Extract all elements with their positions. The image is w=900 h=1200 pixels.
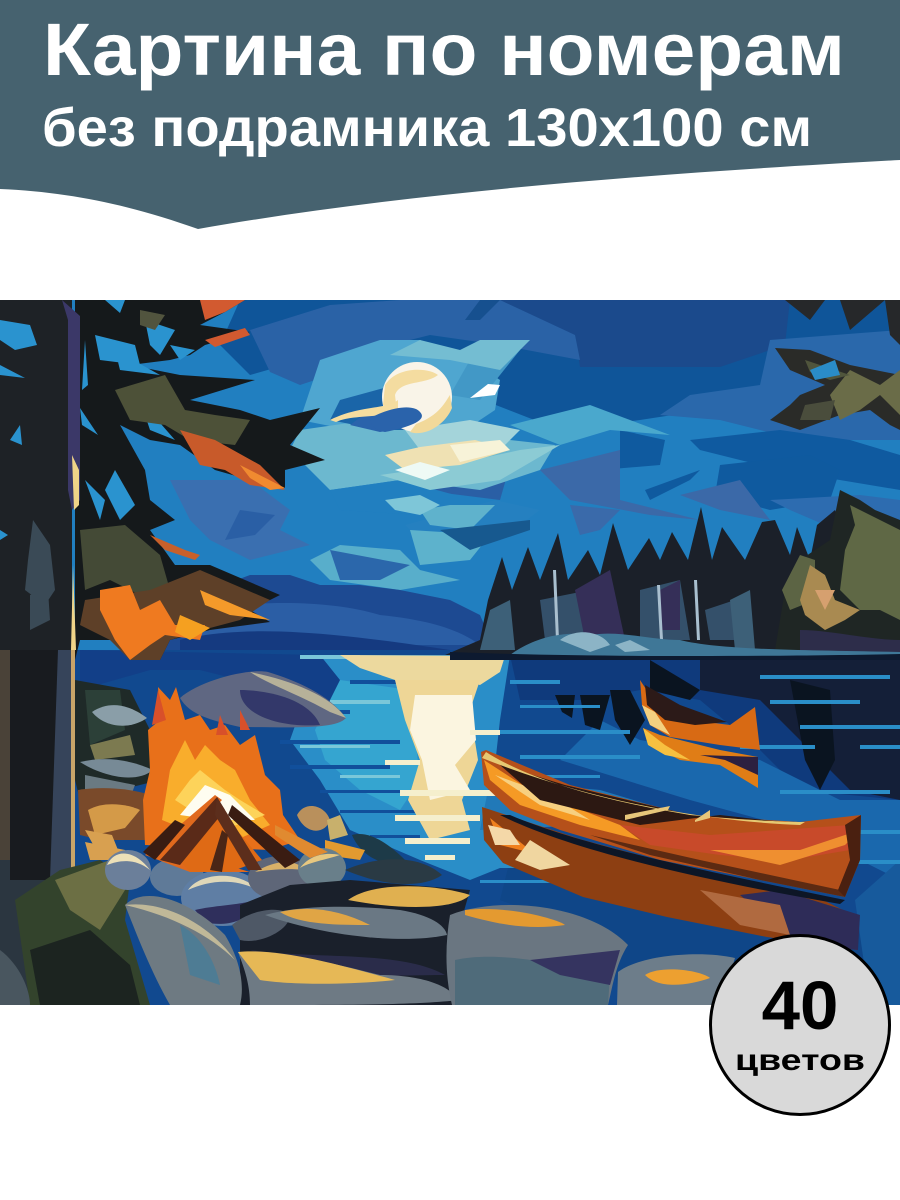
foreground left ground — [0, 650, 160, 1010]
water: ripples — [470, 675, 900, 883]
painting: lake at night — [0, 300, 900, 1010]
tree: orange needles — [200, 300, 250, 347]
shore boulders — [510, 634, 900, 658]
badge label: цветов — [735, 1044, 865, 1077]
tree: sky holes — [80, 300, 195, 520]
moon reflection — [340, 655, 505, 860]
campfire — [143, 687, 328, 872]
badge number: 40 — [762, 967, 838, 1044]
water — [0, 650, 900, 1010]
large canoe reflection — [482, 807, 860, 950]
tree: trunk bark light — [62, 300, 80, 510]
right tree green — [808, 490, 900, 558]
small canoe — [640, 680, 760, 788]
sky: bright cloud bands — [302, 340, 500, 426]
campfire ring stones — [78, 788, 442, 926]
subtitle: без подрамника 130х100 см — [42, 98, 812, 158]
water: reflected tree shadows — [555, 660, 835, 790]
badge: 40 colours — [710, 936, 890, 1114]
top right branches — [770, 300, 900, 430]
forest — [445, 507, 836, 655]
moon — [330, 362, 452, 433]
treeline — [445, 490, 900, 660]
tree: green needles — [115, 375, 250, 445]
header banner — [0, 0, 900, 229]
left pine tree — [0, 300, 325, 660]
distant hills — [165, 575, 484, 650]
tree: trunk — [0, 300, 72, 660]
foreground rocks — [125, 880, 735, 1005]
large rock near fire — [80, 671, 346, 798]
title: Картина по номерам — [43, 8, 845, 91]
sky — [72, 300, 900, 650]
large canoe — [481, 750, 861, 904]
